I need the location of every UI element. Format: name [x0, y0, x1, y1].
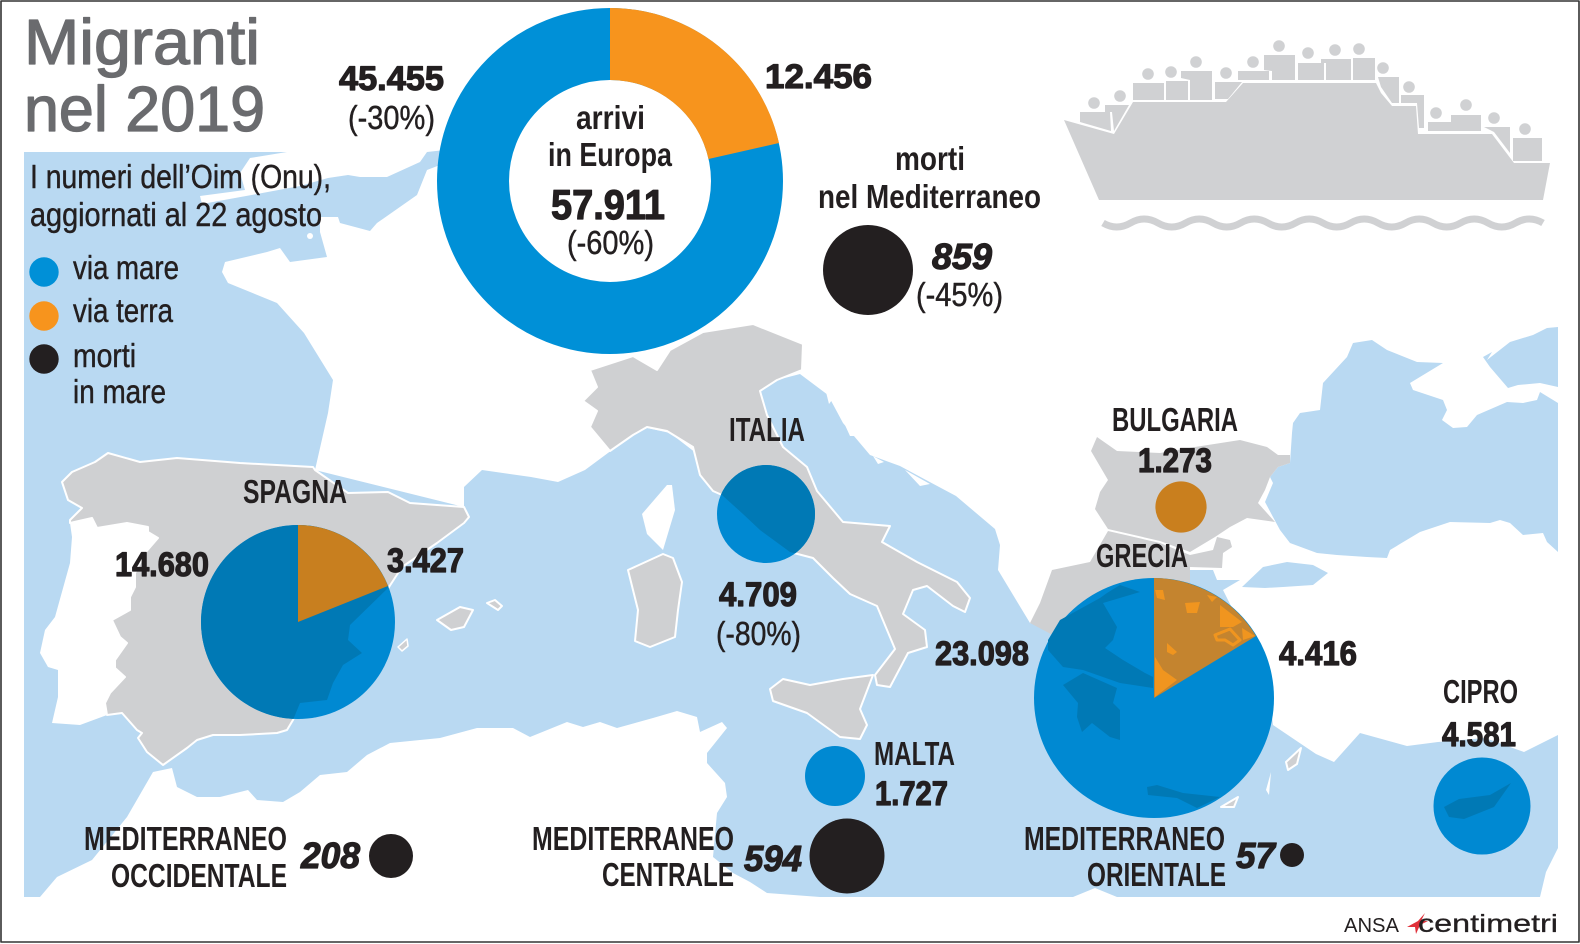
value: Italia: 4.709	[719, 576, 797, 614]
total deaths bubble: 859	[932, 236, 992, 277]
donut chart: arrivals in Europe	[473, 8, 779, 318]
map: Italy	[583, 324, 970, 687]
map: Rhodes and Karpathos	[1221, 748, 1301, 807]
donut centre text: arrivi	[576, 99, 645, 136]
legend: morti in mare: in mare	[73, 373, 166, 410]
bubble: Bulgaria	[1155, 481, 1207, 533]
legend: morti in mare: morti	[73, 337, 136, 374]
deaths: Mediterraneo centrale	[532, 818, 884, 894]
bubble: Italia	[717, 465, 815, 563]
icon: red star	[1407, 913, 1428, 934]
donut centre text	[548, 99, 673, 261]
legend: morti in mare	[29, 337, 166, 410]
title	[24, 6, 265, 145]
label: Malta	[874, 735, 955, 813]
value: Italia	[716, 576, 801, 652]
bubble: Cipro	[1434, 758, 1530, 854]
map: Balearic islands	[398, 600, 502, 651]
map: Sea of Azov	[1483, 327, 1558, 388]
value: Grecia via terra: 4.416	[1279, 635, 1357, 673]
label: Cipro: 4.581	[1442, 716, 1516, 754]
map: Spain	[62, 453, 469, 765]
deaths: Mediterraneo centrale: MEDITERRANEO	[532, 820, 734, 857]
map: Sea of Marmara	[1242, 562, 1328, 588]
map: Sardinia	[628, 554, 682, 647]
value: Italia: (-80%)	[716, 615, 801, 652]
subtitle: aggiornati al 22 agosto	[30, 196, 322, 233]
value: Spagna via mare: 14.680	[115, 546, 209, 584]
map: Portugal	[40, 518, 158, 725]
deaths: Mediterraneo occidentale: 208	[300, 835, 360, 876]
donut centre text: in Europa	[548, 136, 673, 173]
legend: via mare: via mare	[73, 249, 179, 286]
map: Greece mainland	[1030, 531, 1232, 660]
orange wedge	[1154, 578, 1256, 698]
Greek mainland shape	[1048, 585, 1153, 688]
value: Spagna via terra: 3.427	[387, 542, 464, 580]
map: Corsica	[642, 485, 675, 550]
map: Black Sea	[1265, 340, 1558, 558]
donut value: via mare	[339, 60, 444, 136]
panel: map of the Mediterranean	[24, 150, 1558, 897]
credit: ANSA Centimetri: centimetri	[1418, 910, 1558, 938]
total deaths bubble	[823, 225, 1003, 315]
deaths: Mediterraneo centrale: 594	[744, 838, 802, 879]
label: Italia: ITALIA	[729, 411, 805, 448]
credit: ANSA Centimetri: ANSA	[1344, 915, 1400, 937]
donut centre text: 57.911	[551, 181, 665, 228]
heading: morti nel Mediterraneo: nel Mediterraneo	[818, 178, 1041, 215]
heading: morti nel Mediterraneo	[818, 140, 1041, 215]
title: nel 2019	[24, 73, 265, 145]
legend	[29, 249, 179, 410]
label: Cipro: CIPRO	[1443, 673, 1518, 710]
donut value: via mare: 45.455	[339, 60, 444, 98]
title: Migranti	[24, 6, 260, 78]
subtitle	[30, 158, 331, 233]
donut centre text: (-60%)	[567, 224, 654, 261]
map: Bulgaria	[1091, 437, 1290, 552]
legend: via terra: via terra	[73, 292, 174, 329]
map: Adriatic islands	[826, 392, 930, 486]
deaths: Mediterraneo orientale	[1024, 820, 1304, 893]
value: Grecia via mare: 23.098	[935, 635, 1029, 673]
bubble: Malta	[805, 746, 865, 806]
deaths: Mediterraneo orientale: MEDITERRANEO	[1024, 820, 1225, 857]
Peloponnese shape	[1063, 673, 1120, 740]
total deaths bubble: (-45%)	[916, 276, 1003, 313]
map: sea	[24, 150, 1558, 897]
deaths: Mediterraneo occidentale: OCCIDENTALE	[111, 857, 287, 894]
label: Bulgaria: 1.273	[1138, 442, 1212, 480]
pie chart: Spagna	[201, 525, 395, 719]
deaths: Mediterraneo occidentale: MEDITERRANEO	[84, 820, 287, 857]
label: Bulgaria	[1112, 401, 1238, 480]
label: Spagna: SPAGNA	[243, 473, 347, 510]
deaths: Mediterraneo orientale: ORIENTALE	[1087, 856, 1226, 893]
label: Grecia: GRECIA	[1096, 537, 1188, 574]
pie chart: Grecia	[1034, 578, 1274, 818]
heading: morti nel Mediterraneo: morti	[895, 140, 965, 177]
label: Malta: MALTA	[874, 735, 955, 772]
deaths: Mediterraneo occidentale	[84, 820, 413, 894]
donut value: via mare: (-30%)	[348, 99, 435, 136]
credit: ANSA Centimetri	[1344, 910, 1558, 938]
deaths: Mediterraneo centrale: CENTRALE	[602, 856, 734, 893]
legend: via mare	[29, 249, 179, 287]
deaths: Mediterraneo orientale: 57	[1236, 835, 1277, 876]
label: Bulgaria: BULGARIA	[1112, 401, 1238, 438]
label: Cipro	[1442, 673, 1518, 754]
Crete shape	[1147, 785, 1220, 808]
donut value: via terra: 12.456	[765, 58, 872, 96]
map: Channel island	[307, 233, 313, 239]
subtitle: I numeri dell’Oim (Onu),	[30, 158, 331, 195]
map: Sicily	[770, 675, 873, 739]
label: Malta: 1.727	[875, 775, 948, 813]
icon: water wave	[1103, 219, 1543, 227]
legend: via terra	[29, 292, 174, 331]
icon: ship with migrants	[1064, 40, 1550, 200]
